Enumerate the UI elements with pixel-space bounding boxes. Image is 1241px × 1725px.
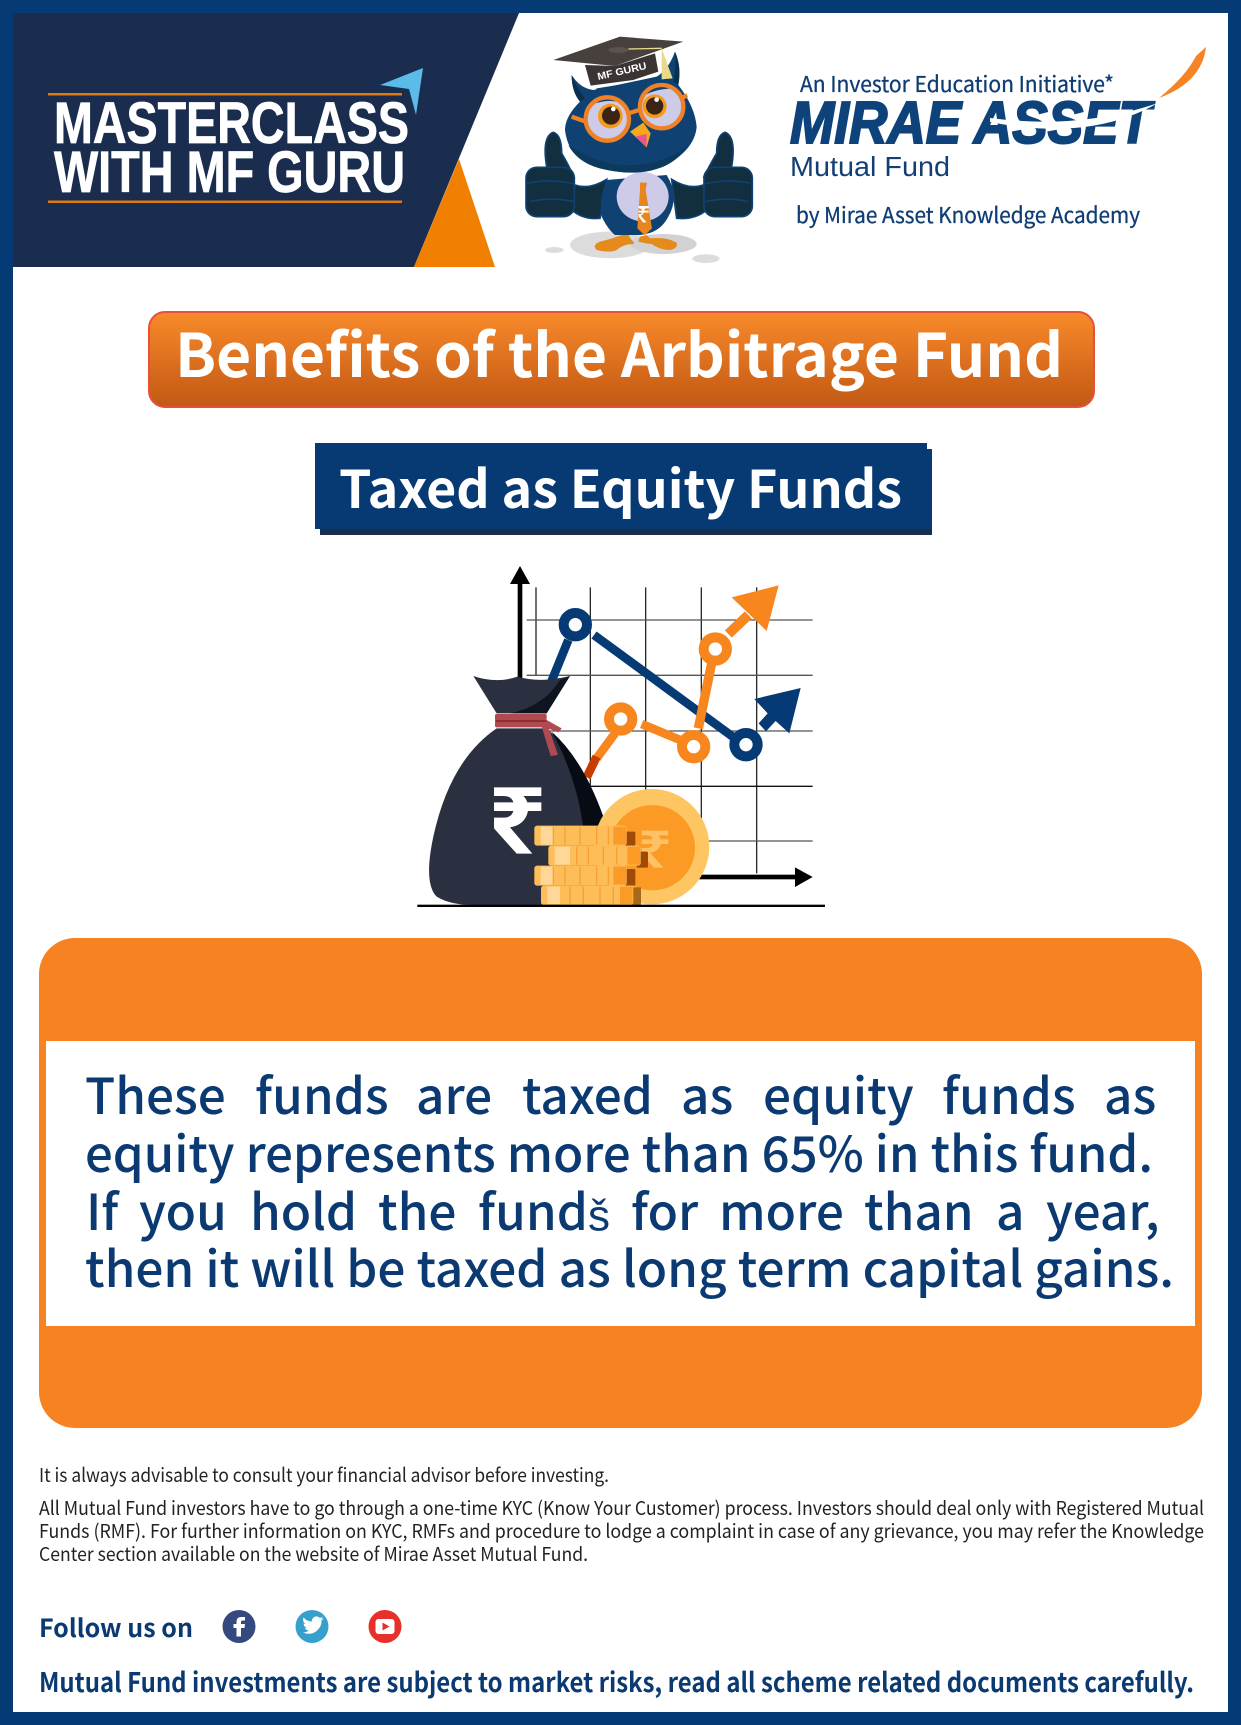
body text: are bbox=[416, 1058, 492, 1129]
y axis arrow bbox=[510, 566, 530, 683]
body text: These bbox=[85, 1058, 226, 1129]
chart grid bbox=[527, 587, 813, 873]
body text: than bbox=[864, 1174, 974, 1245]
body text: a bbox=[996, 1174, 1024, 1245]
body text: fund bbox=[478, 1174, 588, 1245]
rupee on bag bbox=[494, 787, 541, 854]
icon: paper plane bbox=[380, 68, 423, 115]
cap label: MF GURU bbox=[597, 61, 648, 83]
body text: hold bbox=[250, 1174, 357, 1245]
body text: equity represents more than 65% in this fund. bbox=[85, 1116, 1153, 1187]
body text: taxed bbox=[522, 1058, 653, 1129]
mutual fund text: Mutual Fund bbox=[790, 151, 950, 182]
left wing and thumb bbox=[526, 132, 607, 219]
owl head bbox=[565, 52, 697, 172]
owl feet bbox=[595, 235, 677, 252]
title text: Benefits of the Arbitrage Fund bbox=[175, 308, 1063, 395]
body text bbox=[85, 1058, 1174, 1302]
banner dark panel bbox=[13, 13, 519, 267]
body text: the bbox=[378, 1174, 456, 1245]
brand name: MIRAE ASSET bbox=[790, 90, 1155, 156]
glasses lens fill bbox=[586, 85, 683, 141]
coin stack bbox=[534, 826, 648, 905]
blue trend line bbox=[551, 613, 801, 756]
owl body bbox=[601, 175, 674, 235]
disclaimer text: It is always advisable to consult your financial advisor before investing. bbox=[39, 1461, 609, 1488]
body text: funds bbox=[255, 1058, 389, 1129]
banner orange triangle bbox=[414, 159, 495, 267]
body text: If bbox=[86, 1174, 120, 1245]
body text: more bbox=[719, 1174, 844, 1245]
owl lower face shade bbox=[568, 145, 688, 173]
ground shadows bbox=[545, 232, 720, 263]
right wing and thumb bbox=[672, 132, 752, 219]
rupee on coin bbox=[642, 831, 668, 868]
body text: as bbox=[1104, 1058, 1156, 1129]
large coin bbox=[594, 789, 709, 904]
glasses frames bbox=[572, 85, 687, 141]
owl tie bbox=[637, 183, 652, 235]
blue arrow head bbox=[754, 688, 801, 733]
banner bottom rule bbox=[48, 200, 402, 203]
rupee on tie bbox=[639, 206, 649, 222]
disclaimer text bbox=[39, 1461, 1204, 1567]
body text: year, bbox=[1046, 1174, 1160, 1245]
follow us label: Follow us on bbox=[39, 1609, 193, 1645]
orange content panel bbox=[39, 938, 1202, 1428]
logo orange swoosh bbox=[1159, 47, 1206, 98]
graduation cap bbox=[553, 37, 683, 86]
body text: funds bbox=[942, 1058, 1076, 1129]
header banner bbox=[13, 13, 519, 267]
subtitle box bbox=[315, 443, 933, 535]
logo white swoosh bbox=[990, 103, 1158, 129]
body text: equity bbox=[763, 1058, 914, 1129]
title pill bbox=[149, 308, 1094, 407]
academy text: by Mirae Asset Knowledge Academy bbox=[796, 198, 1140, 230]
banner top rule bbox=[48, 93, 402, 96]
money bag bbox=[429, 676, 613, 905]
icon: facebook bbox=[222, 1610, 256, 1643]
orange trend line bbox=[587, 585, 779, 777]
disclaimer text: Center section available on the website of Mirae Asset Mutual Fund. bbox=[39, 1540, 588, 1567]
owl ear tufts bbox=[572, 52, 679, 102]
subtitle text: Taxed as Equity Funds bbox=[339, 448, 902, 523]
chart illustration bbox=[417, 566, 825, 907]
ground line bbox=[417, 905, 825, 907]
beak bbox=[630, 123, 651, 147]
bag rope bbox=[495, 714, 562, 756]
white text panel bbox=[46, 1041, 1195, 1326]
banner title line one: MASTERCLASS bbox=[54, 91, 409, 156]
owl mascot bbox=[526, 37, 752, 263]
banner title line two: WITH MF GURU bbox=[54, 140, 405, 205]
icon: twitter bbox=[296, 1610, 328, 1643]
eyes bbox=[598, 94, 667, 128]
body text: you bbox=[139, 1174, 227, 1245]
logo block bbox=[790, 47, 1206, 230]
orange arrow head bbox=[732, 585, 779, 631]
body text: for bbox=[631, 1174, 699, 1245]
owl belly bbox=[617, 172, 669, 221]
owl brow bbox=[585, 77, 677, 108]
body text: š bbox=[588, 1191, 610, 1240]
icon: youtube bbox=[368, 1610, 402, 1643]
x axis arrow bbox=[693, 867, 813, 887]
body text: then it will be taxed as long term capital gains. bbox=[85, 1231, 1174, 1302]
initiative text: An Investor Education Initiative* bbox=[800, 67, 1114, 99]
body text: as bbox=[681, 1058, 733, 1129]
